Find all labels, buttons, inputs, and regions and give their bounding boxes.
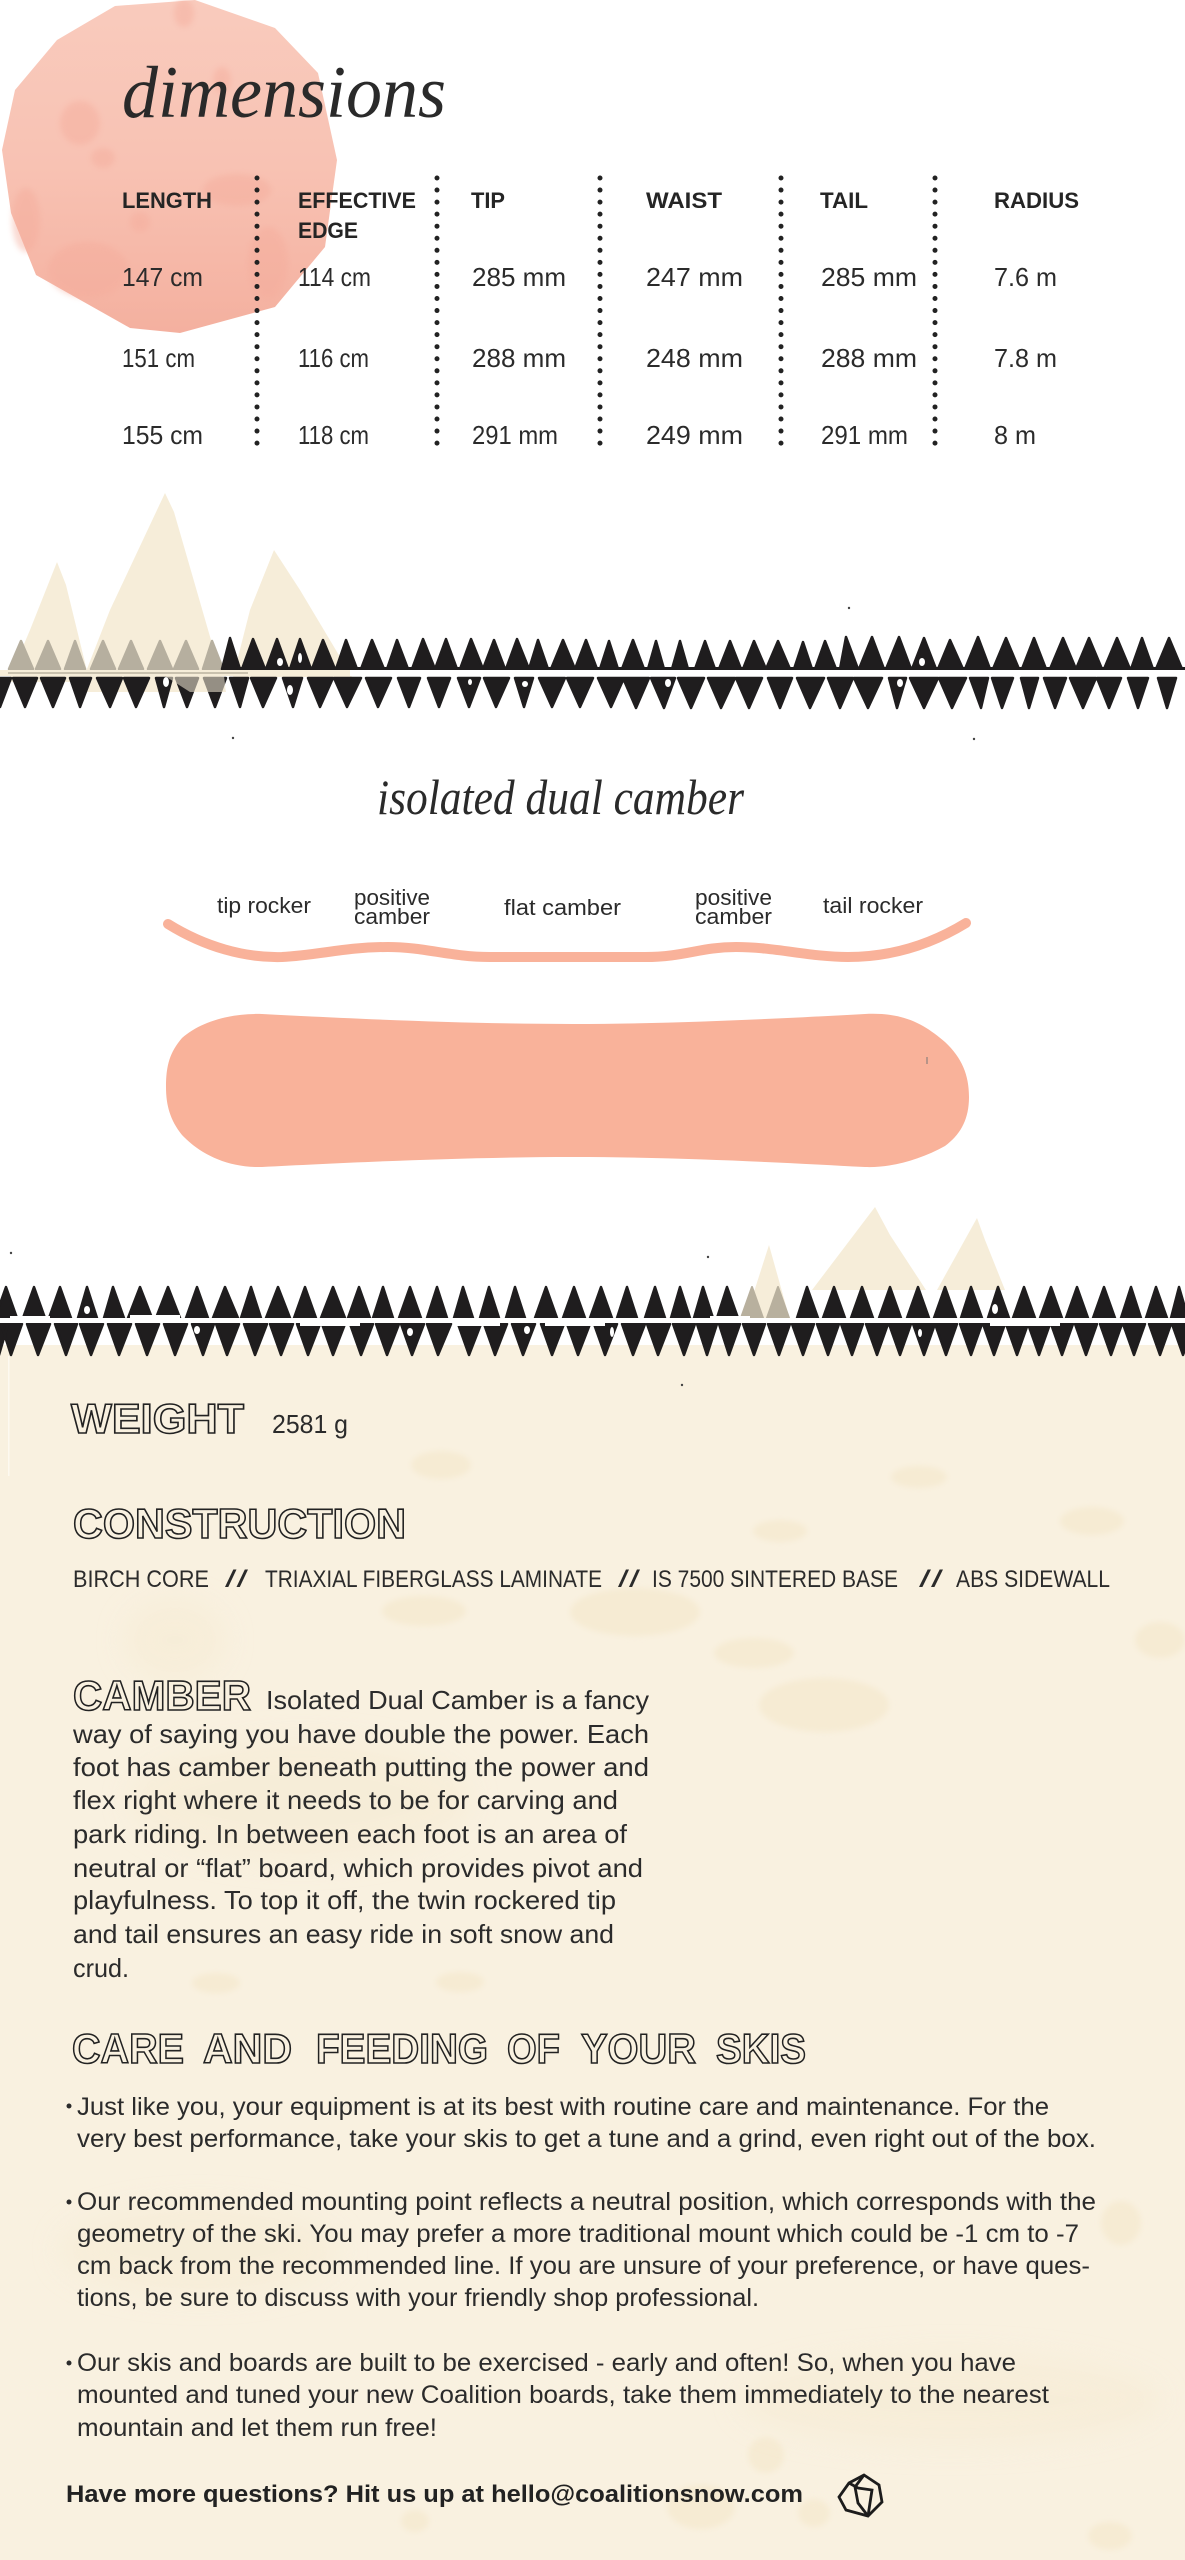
illustration: lower mountains and triangle strip [0, 1207, 1185, 1355]
table values: 116 cm [298, 343, 369, 373]
diagram: camber labels: camber [695, 904, 772, 929]
table values [122, 262, 1057, 450]
text block: camber: way of saying you have double the power. Each [72, 1719, 649, 1749]
table values: 249 mm [646, 420, 743, 450]
table values: 7.8 m [994, 343, 1057, 373]
mountains: upper left [8, 493, 352, 692]
text block: camber: and tail ensures an easy ride in soft snow and [73, 1919, 614, 1949]
text block: camber: park riding. In between each foot is an area of [73, 1819, 628, 1849]
diagram: camber labels: flat camber [504, 895, 621, 920]
heading: weight [71, 1395, 348, 1442]
triangle row: top, black [222, 637, 1182, 669]
text block: camber: foot has camber beneath putting the power and [73, 1752, 649, 1782]
decorative pink watercolor circle [2, 0, 337, 333]
heading: care and feeding of your skis: CARE [72, 2025, 184, 2072]
table headers: WAIST [646, 188, 723, 213]
table values: 247 mm [646, 262, 743, 292]
table headers: EDGE [298, 218, 358, 243]
text block: care tip 2: cm back from the recommended line. If you are unsure of your preference, or have ques- [77, 2252, 1090, 2280]
illustration: upper mountains and triangle strip [0, 493, 1185, 708]
diagram: camber labels [217, 885, 923, 929]
table values: 8 m [994, 420, 1036, 450]
speckles [163, 653, 925, 695]
table values: 118 cm [298, 420, 369, 450]
table headers [122, 188, 1079, 243]
table values: 155 cm [122, 420, 203, 450]
table values: 288 mm [821, 343, 917, 373]
text block: care tip 2: geometry of the ski. You may prefer a more traditional mount which could be -1 cm to -7 [77, 2220, 1079, 2248]
specks [10, 607, 975, 1386]
triangle row: top, faded [741, 1287, 789, 1318]
icon: coalition logo [839, 2475, 882, 2516]
diagram: camber labels: tail rocker [823, 893, 923, 918]
table values: 248 mm [646, 343, 743, 373]
heading: care and feeding of your skis [72, 2025, 806, 2072]
text block: care tip 2: Our recommended mounting point reflects a neutral position, which corresponds with the [77, 2188, 1096, 2216]
diagram: camber labels: tip rocker [217, 893, 311, 918]
table values: 147 cm [122, 262, 203, 292]
text block: care tip 3: mounted and tuned your new Coalition boards, take them immediately to the nearest [77, 2381, 1049, 2409]
triangle row: bottom [0, 678, 1176, 708]
table values: 151 cm [122, 343, 195, 373]
text block: camber: Isolated Dual Camber is a fancy [266, 1685, 649, 1715]
diagram: camber labels: positive [695, 885, 772, 910]
mountains: lower right [745, 1207, 1005, 1320]
table values: 291 mm [821, 420, 908, 450]
text block: camber: neutral or “flat” board, which provides pivot and [73, 1853, 643, 1883]
table headers: TIP [471, 188, 505, 213]
panel: cream lower background [0, 1345, 1185, 2560]
table values: 114 cm [298, 262, 371, 292]
center bars [0, 1318, 1185, 1323]
text: construction materials: TRIAXIAL FIBERGLASS LAMINATE [265, 1566, 602, 1593]
text block: care tip 1: Just like you, your equipment is at its best with routine care and maintenance. For the [77, 2093, 1049, 2121]
table values: 291 mm [472, 420, 558, 450]
table values: 7.6 m [994, 262, 1057, 292]
heading: weight: WEIGHT [71, 1395, 244, 1442]
table values: 288 mm [472, 343, 566, 373]
text block: camber: CAMBER [73, 1672, 251, 1719]
text: construction materials: BIRCH CORE [73, 1566, 209, 1593]
triangle row: top [0, 1287, 1185, 1318]
text: construction materials: // [225, 1566, 249, 1593]
heading: care and feeding of your skis: FEEDING [316, 2025, 488, 2072]
footer contact line: Have more questions? Hit us up at hello@coalitionsnow.com [66, 2481, 803, 2508]
triangle row: top, faded [9, 641, 223, 669]
diagram: camber labels: camber [354, 904, 430, 929]
heading: construction: CONSTRUCTION [73, 1500, 406, 1547]
text: construction materials: // [919, 1566, 944, 1593]
text block: care tip 1: very best performance, take your skis to get a tune and a grind, even right out of the box. [77, 2125, 1096, 2153]
text block: care tip 3 [66, 2349, 1049, 2442]
diagram: camber labels: positive [354, 885, 430, 910]
text block: camber: playfulness. To top it off, the twin rockered tip [73, 1885, 616, 1915]
text: construction materials: // [618, 1566, 641, 1593]
diagram: snowboard shape [166, 1014, 969, 1167]
title: dimensions: dimensions [122, 52, 446, 134]
text: construction materials: ABS SIDEWALL [956, 1566, 1110, 1593]
text block: care tip 1 [66, 2093, 1096, 2153]
text: construction materials: IS 7500 SINTERED BASE [652, 1566, 898, 1593]
heading: care and feeding of your skis: AND [203, 2025, 292, 2072]
text block: care tip 3: mountain and let them run free! [77, 2414, 437, 2442]
table headers: LENGTH [122, 188, 212, 213]
heading: care and feeding of your skis: YOUR [581, 2025, 696, 2072]
text block: care tip 2: tions, be sure to discuss with your friendly shop professional. [77, 2284, 759, 2312]
heading: care and feeding of your skis: OF [507, 2025, 560, 2072]
heading: care and feeding of your skis: SKIS [716, 2025, 806, 2072]
center bars [222, 667, 1185, 670]
table values: 285 mm [821, 262, 917, 292]
heading: isolated dual camber: isolated dual camber [377, 769, 744, 825]
table headers: EFFECTIVE [298, 188, 416, 213]
triangle row: bottom [0, 1324, 1185, 1355]
column dividers [257, 178, 935, 447]
text block: camber: flex right where it needs to be for carving and [73, 1785, 618, 1815]
diagram: camber profile curve [168, 923, 966, 957]
text block: care tip 3: Our skis and boards are built to be exercised - early and often! So, when you have [77, 2349, 1016, 2377]
text: construction materials [73, 1566, 1110, 1593]
text block: camber: crud. [73, 1953, 129, 1983]
table values: 285 mm [472, 262, 566, 292]
text block: camber [72, 1672, 649, 1983]
text block: care tip 2 [66, 2188, 1096, 2312]
table: dimensions [122, 178, 1079, 450]
table headers: TAIL [820, 188, 868, 213]
heading: weight: 2581 g [272, 1409, 348, 1439]
table headers: RADIUS [994, 188, 1079, 213]
